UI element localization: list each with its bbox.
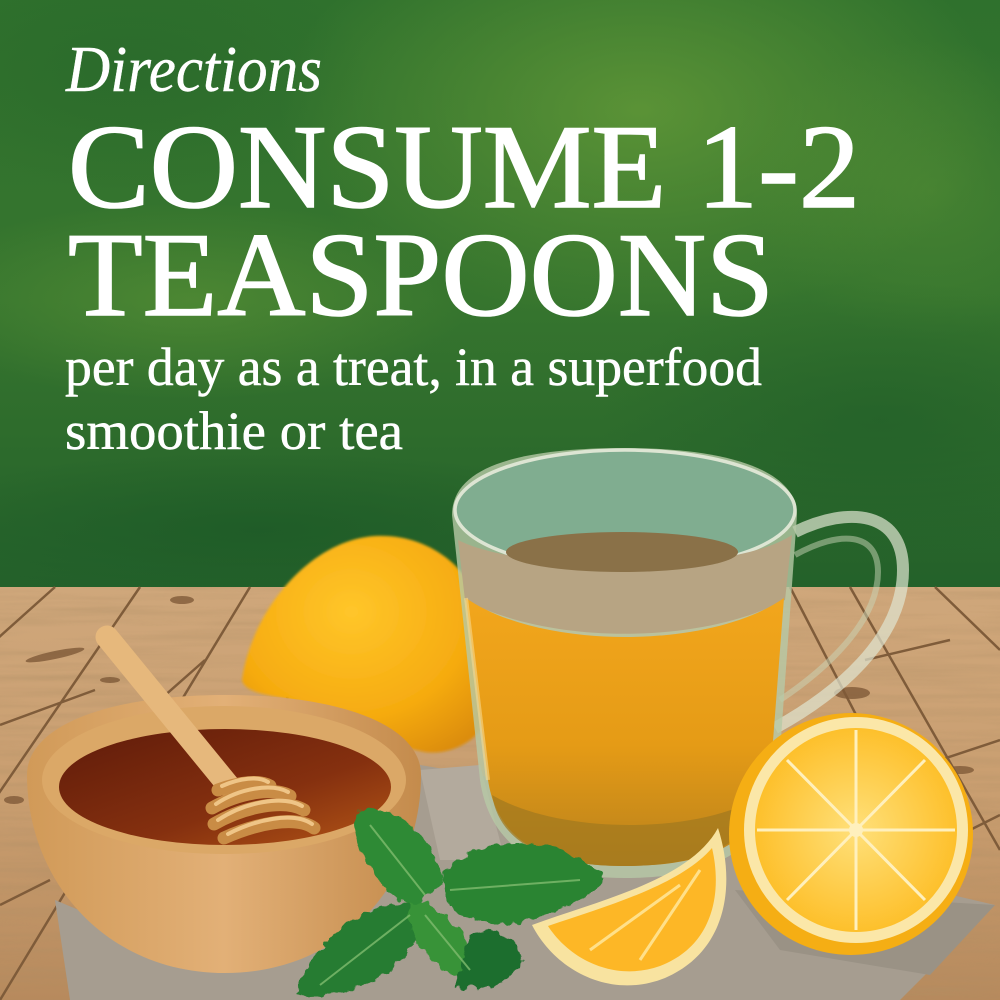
- body line 2: smoothie or tea: [65, 401, 403, 461]
- text block: directions heading: [65, 33, 860, 461]
- background: blurred green foliage: [0, 0, 1000, 610]
- wooden table: [0, 587, 1000, 1000]
- honey dipper stick: [107, 637, 228, 785]
- mint leaves: [296, 809, 605, 996]
- headline line 1: CONSUME 1-2: [68, 100, 860, 233]
- honey surface: [59, 729, 391, 845]
- honey dipper head: [212, 783, 314, 838]
- tea body: [466, 598, 784, 866]
- grey linen napkin: [55, 765, 995, 1000]
- whole lemon: [242, 536, 485, 753]
- mug opening: [455, 450, 795, 570]
- body line 1: per day as a treat, in a superfood: [65, 337, 762, 397]
- tea surface: [506, 532, 738, 572]
- wooden bowl of honey: [27, 637, 421, 973]
- headline line 2: TEASPOONS: [68, 208, 774, 341]
- bowl inner rim: [42, 706, 406, 854]
- reflected band: [458, 535, 792, 634]
- subtitle: Directions: Directions: [65, 33, 322, 106]
- lemon wedge: [532, 828, 726, 985]
- bowl body: [27, 695, 421, 973]
- mug glass body: [452, 448, 797, 878]
- mug handle: [775, 517, 903, 728]
- glass mug of tea: [452, 448, 903, 878]
- halved lemon: [729, 713, 973, 955]
